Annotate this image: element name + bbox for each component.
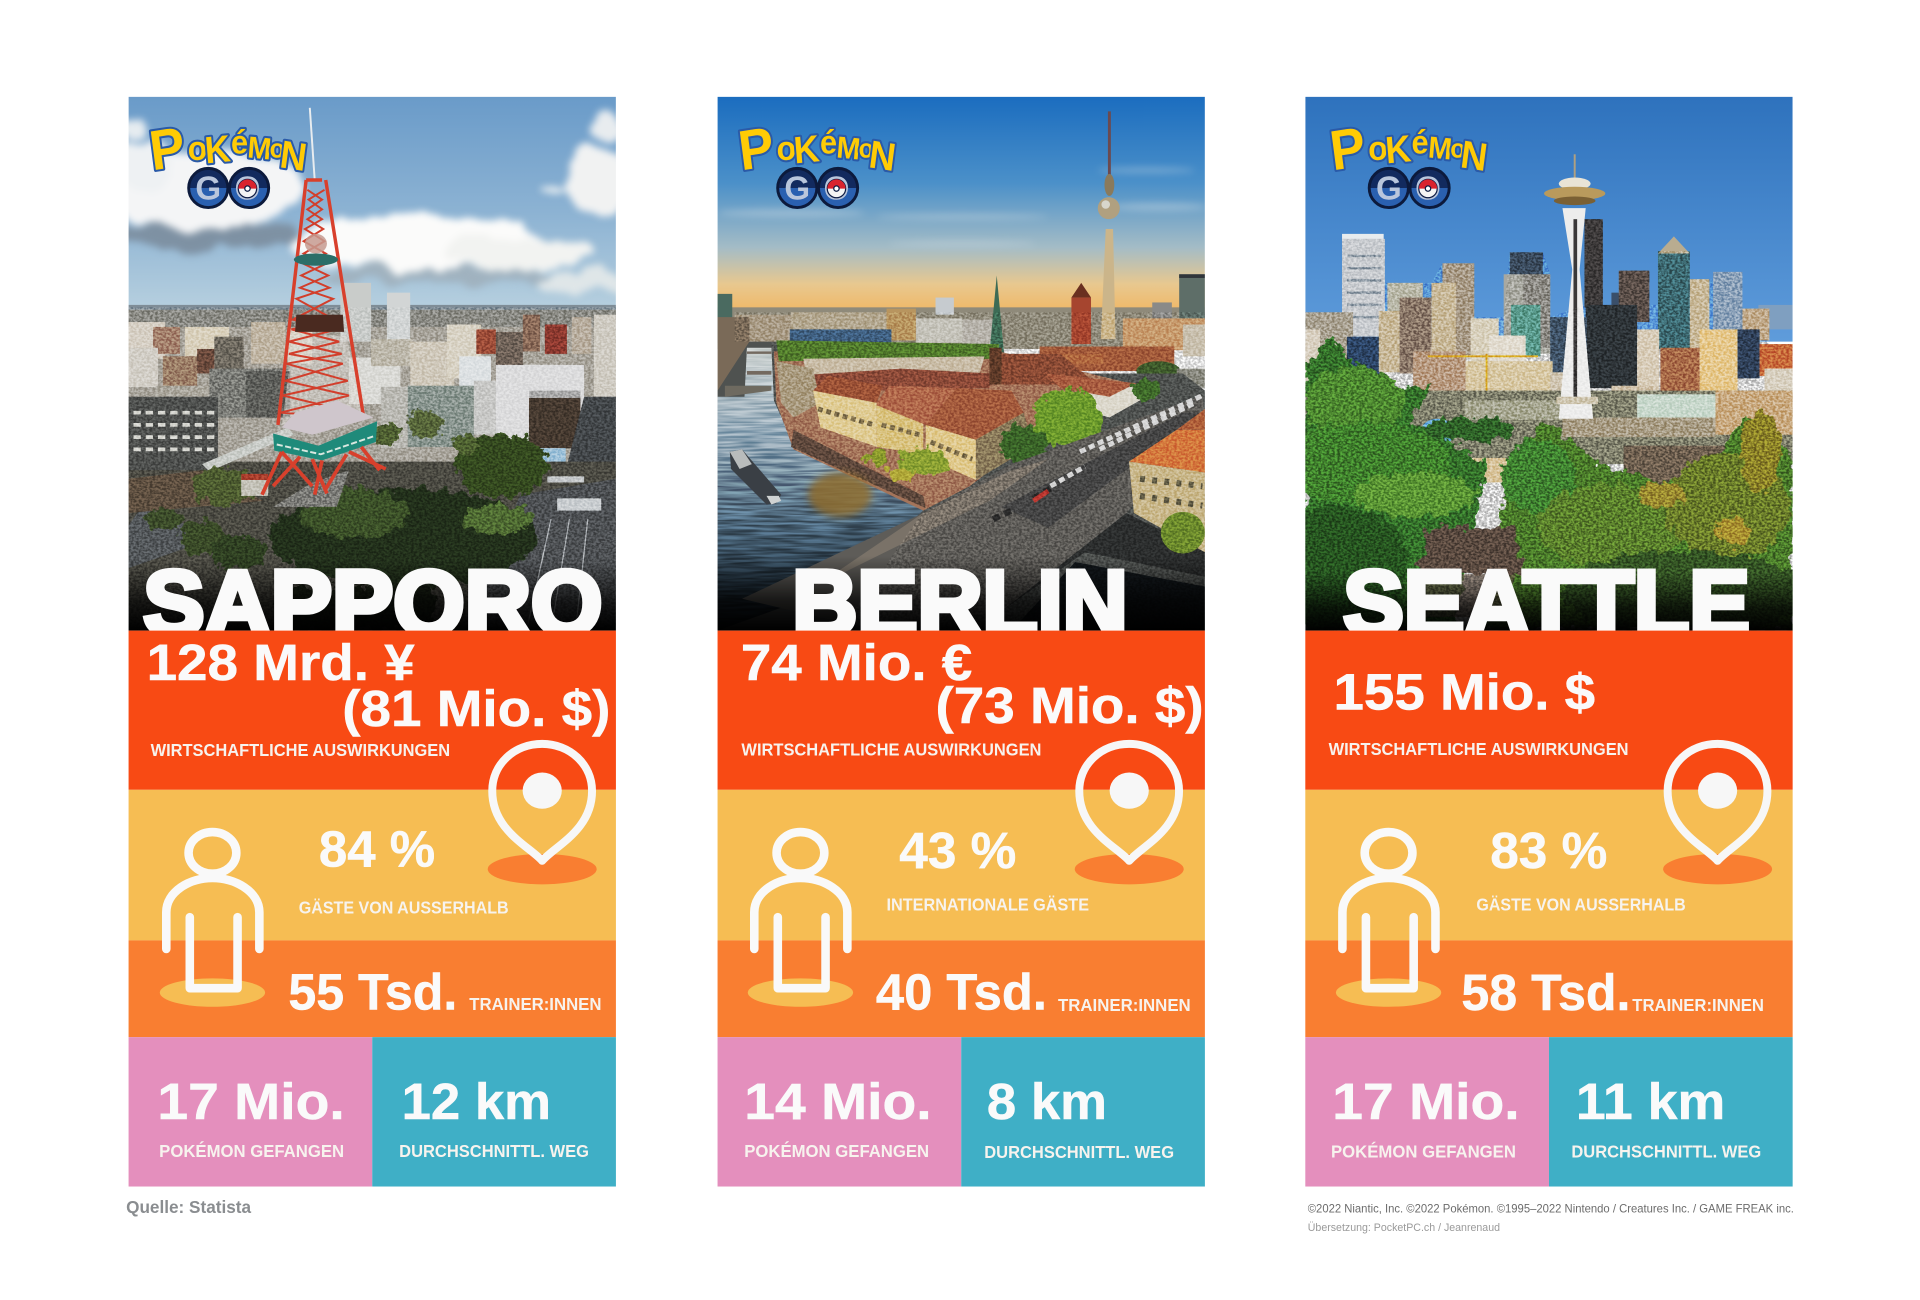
panel: Seattle	[1305, 96, 1793, 1187]
section: economic impact	[718, 631, 1205, 790]
value: 11 km: 11 km	[1576, 1072, 1725, 1130]
label: economic impact: WIRTSCHAFTLICHE AUSWIRKUNGEN	[1329, 739, 1629, 759]
label: Pokémon caught: POKÉMON GEFANGEN	[159, 1141, 344, 1161]
copyright note: ©2022 Niantic, Inc. ©2022 Pokémon. ©1995–2022 Nintendo / Creatures Inc. / GAME FREAK inc.	[1308, 1203, 1794, 1216]
section: average distance	[372, 1037, 616, 1187]
logo: Pokémon GO: O	[235, 171, 260, 208]
label: guests from outside: GÄSTE VON AUSSERHALB	[1476, 894, 1686, 914]
value: 128 Mrd. ¥: 128 Mrd. ¥	[147, 633, 415, 691]
section: visitors	[1305, 790, 1793, 940]
label: average distance: DURCHSCHNITTL. WEG	[984, 1142, 1174, 1162]
value: 83 %: 83 %	[1490, 821, 1607, 879]
label: economic impact: WIRTSCHAFTLICHE AUSWIRKUNGEN	[151, 740, 450, 760]
label: Pokémon caught: POKÉMON GEFANGEN	[1331, 1142, 1516, 1162]
value: 17 Mio.: 17 Mio.	[1332, 1072, 1520, 1130]
logo: Pokémon GO: K	[792, 127, 821, 172]
city title: SAPPORO: SAPPORO	[143, 552, 602, 654]
logo: Pokémon GO: P	[146, 115, 189, 183]
icon: map pin	[1663, 744, 1772, 884]
logo: Pokémon GO: é	[231, 124, 248, 161]
logo: Pokémon GO	[1330, 126, 1488, 209]
section: trainers	[1305, 940, 1793, 1037]
city title: BERLIN: BERLIN	[792, 552, 1128, 654]
value: 8 km: 8 km	[987, 1072, 1107, 1130]
label: trainers: TRAINER:INNEN	[469, 994, 601, 1014]
section: economic impact	[129, 631, 616, 790]
section: visitors	[718, 790, 1205, 940]
section: Pokémon caught	[129, 1037, 372, 1187]
logo: Pokémon GO: o	[1368, 130, 1388, 168]
section: visitors	[129, 790, 616, 940]
icon: map pin	[488, 744, 597, 884]
logo: Pokémon GO: O	[1415, 171, 1441, 208]
logo: Pokémon GO: N	[1458, 133, 1490, 180]
logo: Pokémon GO: o	[1450, 132, 1466, 164]
section: trainers	[129, 940, 616, 1037]
photo: Seattle skyline and Space Needle	[1305, 96, 1793, 631]
icon: person	[160, 832, 265, 1007]
city title: SEATTLE: SEATTLE	[1343, 552, 1750, 654]
value: 81 Mio. $: (81 Mio. $)	[342, 679, 610, 737]
logo: Pokémon GO: G	[195, 171, 221, 208]
logo: Pokémon GO: N	[867, 133, 898, 180]
logo: Pokémon GO: o	[270, 132, 285, 164]
label: average distance: DURCHSCHNITTL. WEG	[1571, 1142, 1761, 1162]
value: 17 Mio.: 17 Mio.	[157, 1072, 345, 1130]
value: 14 Mio.: 14 Mio.	[744, 1072, 932, 1130]
value: 58 Tsd.: 58 Tsd.	[1461, 963, 1630, 1021]
value: 55 Tsd.: 55 Tsd.	[288, 963, 457, 1021]
photo: Sapporo TV tower and skyline	[128, 96, 616, 631]
value: 74 Mio. €: 74 Mio. €	[741, 633, 972, 691]
logo: Pokémon GO: K	[1384, 127, 1413, 172]
section: average distance	[961, 1037, 1205, 1187]
logo: Pokémon GO: K	[203, 127, 233, 172]
logo: Pokémon GO: G	[1376, 171, 1402, 208]
value: 12 km: 12 km	[402, 1072, 551, 1130]
label: trainers: TRAINER:INNEN	[1058, 995, 1191, 1015]
logo: Pokémon GO: N	[278, 133, 309, 180]
logo: Pokémon GO: M	[246, 131, 273, 167]
label: economic impact: WIRTSCHAFTLICHE AUSWIRKUNGEN	[741, 740, 1041, 760]
translation credit: Übersetzung: PocketPC.ch / Jeanrenaud	[1308, 1222, 1500, 1234]
logo: Pokémon GO: M	[835, 131, 862, 167]
icon: map pin	[1075, 744, 1184, 884]
label: trainers: TRAINER:INNEN	[1632, 995, 1764, 1015]
logo: Pokémon GO: o	[188, 130, 207, 168]
logo: Pokémon GO	[148, 126, 308, 209]
value: 43 %: 43 %	[899, 821, 1016, 879]
label: international guests: INTERNATIONALE GÄSTE	[887, 894, 1089, 914]
label: Pokémon caught: POKÉMON GEFANGEN	[744, 1141, 929, 1161]
section: average distance	[1549, 1037, 1793, 1187]
value: 155 Mio. $: 155 Mio. $	[1333, 662, 1595, 720]
section: trainers	[718, 940, 1205, 1037]
source note: Quelle: Statista	[126, 1197, 251, 1217]
value: 73 Mio. $: (73 Mio. $)	[936, 676, 1204, 734]
value: 40 Tsd.: 40 Tsd.	[876, 963, 1047, 1021]
logo: Pokémon GO	[738, 126, 897, 209]
logo: Pokémon GO: é	[1412, 124, 1429, 161]
logo: Pokémon GO: P	[735, 115, 778, 183]
section: economic impact	[1305, 631, 1793, 790]
logo: Pokémon GO: é	[820, 124, 837, 161]
logo: Pokémon GO: P	[1326, 115, 1369, 183]
section: Pokémon caught	[718, 1037, 961, 1187]
panel: Sapporo	[92, 97, 634, 1187]
photo: Berlin TV tower and river Spree	[718, 97, 1207, 654]
logo: Pokémon GO: O	[824, 171, 849, 208]
logo: Pokémon GO: o	[859, 132, 874, 164]
icon: person	[1336, 832, 1441, 1007]
label: guests from outside: GÄSTE VON AUSSERHALB	[299, 897, 509, 917]
logo: Pokémon GO: M	[1427, 131, 1453, 167]
label: average distance: DURCHSCHNITTL. WEG	[399, 1141, 589, 1161]
section: Pokémon caught	[1305, 1037, 1549, 1187]
panel: Berlin	[718, 97, 1207, 1187]
icon: person	[748, 832, 853, 1007]
logo: Pokémon GO: G	[784, 171, 810, 208]
logo: Pokémon GO: o	[777, 130, 796, 168]
value: 84 %: 84 %	[319, 820, 435, 878]
